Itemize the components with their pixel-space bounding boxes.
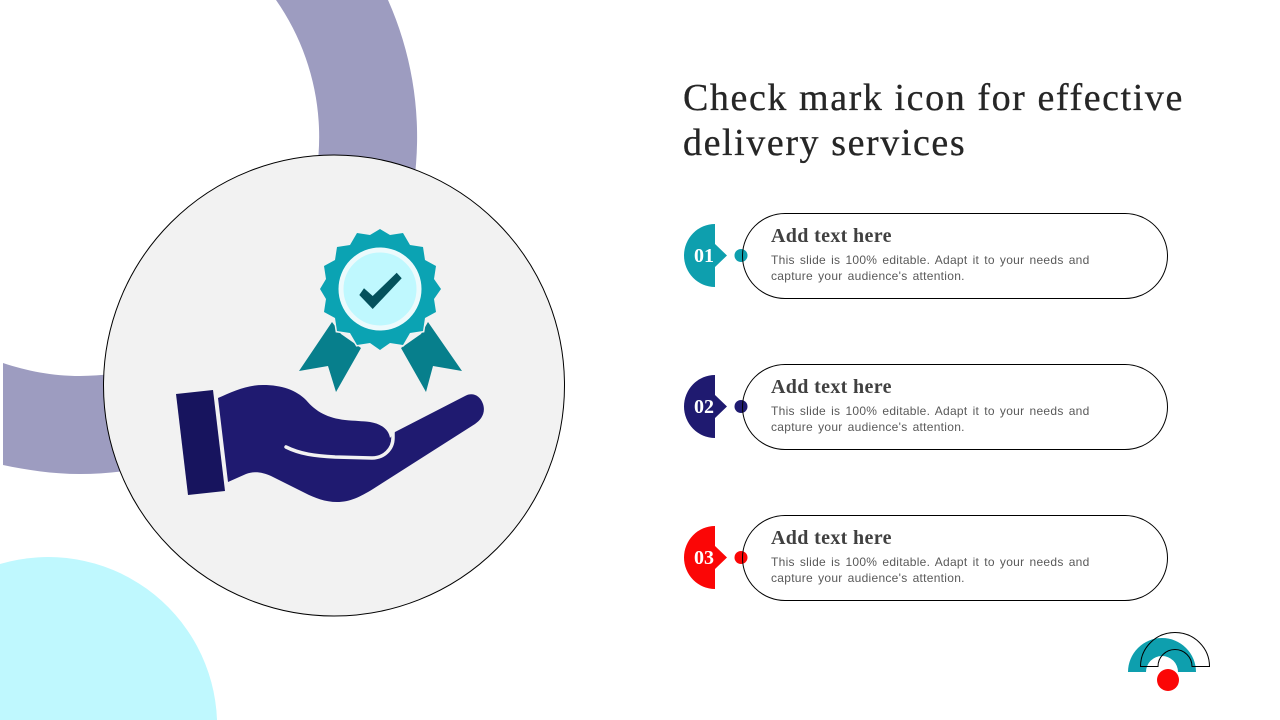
- text pill 03: [742, 516, 1168, 600]
- body text 02: capture your audience's attention.: [771, 420, 965, 434]
- scalloped seal: [320, 229, 441, 350]
- body text 03: capture your audience's attention.: [771, 571, 965, 585]
- body text 01: This slide is 100% editable. Adapt it to your needs and: [771, 253, 1090, 267]
- body text 03: This slide is 100% editable. Adapt it to your needs and: [771, 555, 1090, 569]
- decorative lavender ring: [3, 0, 417, 474]
- list item 01: [684, 214, 1168, 298]
- shirt cuff: [176, 390, 225, 495]
- connector dot 02: [734, 400, 748, 413]
- number 01: 01: [694, 245, 714, 267]
- connector dot 01: [734, 249, 748, 262]
- list item 03: [684, 516, 1168, 600]
- number tab 01: [684, 224, 727, 287]
- body text 02: This slide is 100% editable. Adapt it to your needs and: [771, 404, 1090, 418]
- seal inner disc: [341, 250, 419, 328]
- title: Check mark icon for effective: [683, 77, 1184, 119]
- number tab 02: [684, 375, 727, 438]
- left ribbon: [299, 322, 361, 392]
- text pill 02: [742, 364, 1168, 450]
- heading 01: Add text here: [771, 225, 892, 247]
- icon: award badge with check mark: [299, 229, 462, 392]
- teal arch: [1128, 638, 1196, 672]
- title: delivery services: [683, 122, 966, 164]
- finger crease: [286, 432, 393, 458]
- right ribbon: [401, 322, 462, 392]
- heading 02: Add text here: [771, 376, 892, 398]
- heading 03: Add text here: [771, 527, 892, 549]
- hand silhouette: [218, 385, 484, 502]
- body text 01: capture your audience's attention.: [771, 269, 965, 283]
- main grey circle panel: [104, 155, 564, 616]
- number 02: 02: [694, 396, 714, 418]
- number 03: 03: [694, 547, 714, 569]
- number tab 03: [684, 526, 727, 589]
- check mark: [359, 273, 402, 309]
- red dot: [1157, 669, 1179, 691]
- outlined arch: [1140, 632, 1210, 666]
- connector dot 03: [734, 551, 748, 564]
- list item 02: [684, 364, 1168, 450]
- light cyan corner circle: [0, 557, 217, 720]
- icon: open hand: [176, 385, 484, 502]
- decorative arches and dot: [1128, 632, 1210, 691]
- text pill 01: [742, 214, 1168, 298]
